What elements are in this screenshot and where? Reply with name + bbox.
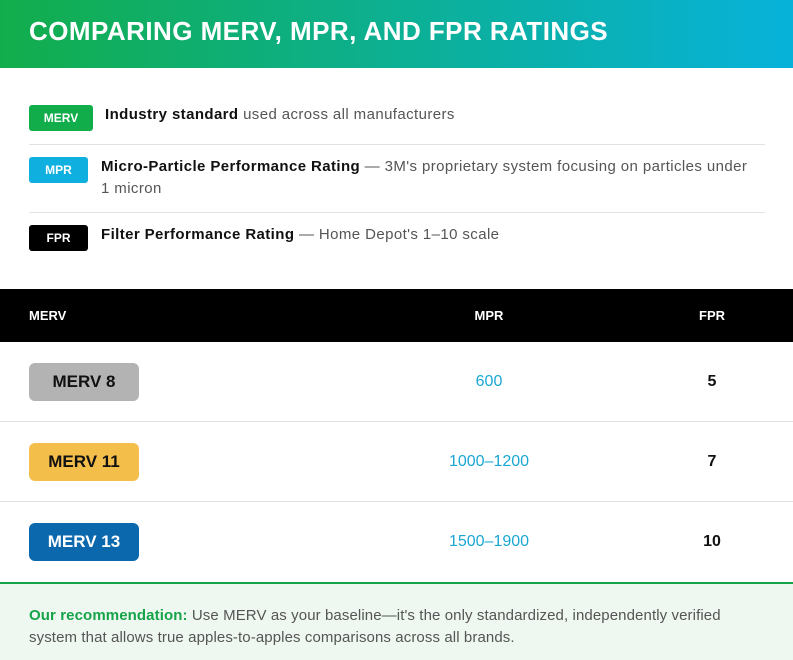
text: MPR [101, 158, 747, 197]
row: MERV 11: 1000–1200 [449, 453, 529, 470]
badge: MPR: MPR [45, 163, 72, 177]
recommendation callout: system that allows true apples-to-apples comparisons across all brands. [29, 629, 515, 646]
badge: MERV: MERV [44, 111, 78, 125]
table header: FPR [699, 308, 725, 323]
header [0, 0, 793, 68]
text: MPR: Micro-Particle Performance Rating — 3M's proprietary system focusing on particles under [101, 158, 747, 175]
row: MERV 8: 600 [476, 373, 502, 390]
row: MERV 8: MERV 8 [52, 372, 116, 391]
recommendation callout [0, 582, 793, 660]
legend [29, 105, 765, 251]
badge: MPR [29, 157, 88, 183]
row: MERV 13: 10 [703, 533, 721, 550]
table header: MERV [29, 308, 66, 323]
text: FPR: Filter Performance Rating — Home Depot's 1–10 scale [101, 226, 499, 243]
badge: MERV [29, 105, 93, 131]
row: MERV 8 [0, 342, 793, 422]
row: MERV 8: 5 [708, 373, 716, 390]
text: MPR: 1 micron [101, 180, 162, 197]
row: MERV 13: 1500–1900 [449, 533, 529, 550]
text: MERV: Industry standard used across all manufacturers [105, 106, 455, 123]
table [0, 289, 793, 561]
recommendation callout: Our recommendation: Use MERV as your baseline—it's the only standardized, independently verified [29, 607, 721, 624]
row: MERV 11 [0, 422, 793, 502]
table header [0, 289, 793, 342]
row: MERV 11: MERV 11 [48, 452, 120, 471]
title: COMPARING MERV, MPR, AND FPR RATINGS [29, 16, 608, 46]
table header: MPR [475, 308, 503, 323]
row: MERV 11: 7 [708, 453, 716, 470]
row: MERV 13 [29, 523, 721, 561]
row: MERV 13: MERV 13 [48, 532, 120, 551]
badge: FPR: FPR [46, 231, 70, 245]
badge: FPR [29, 225, 88, 251]
